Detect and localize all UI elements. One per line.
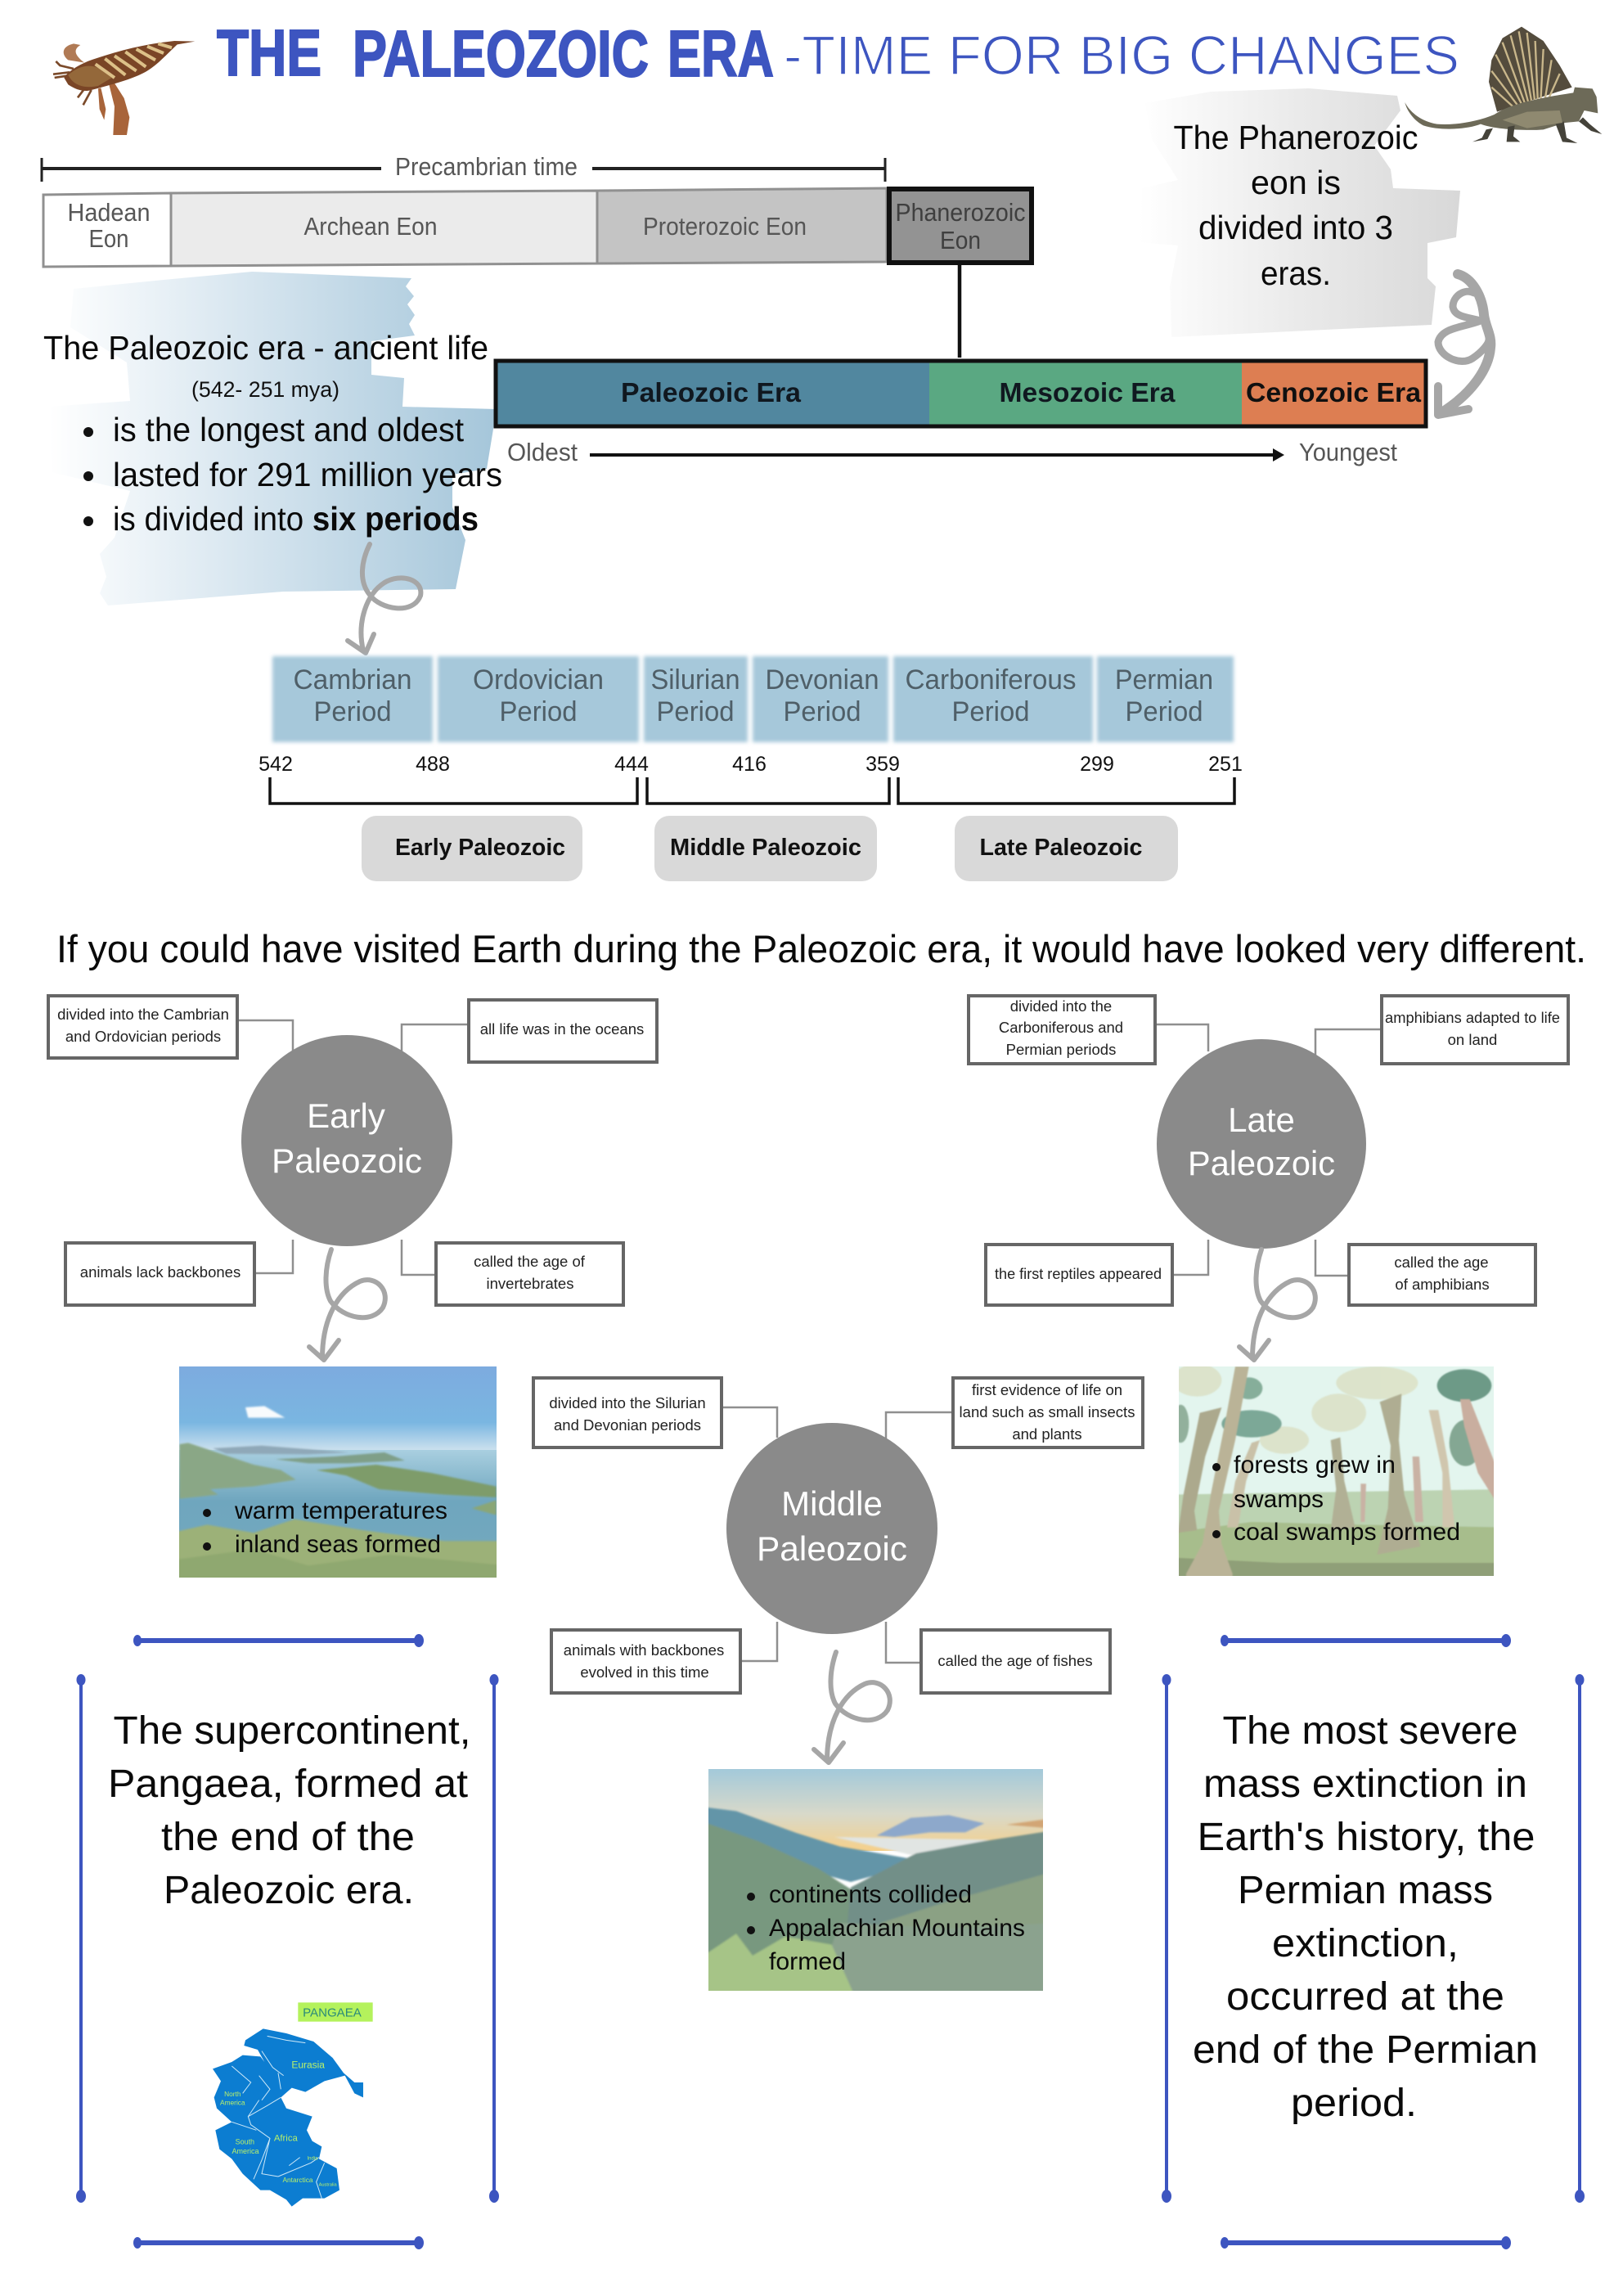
extinction text: Earth's history, the	[1198, 1816, 1535, 1859]
map: Pangaea: Antarctica	[282, 2176, 313, 2184]
pill: Late Paleozoic	[955, 816, 1178, 881]
Pangaea text: The supercontinent,	[113, 1709, 471, 1753]
title: -TIME FOR BIG CHANGES	[784, 25, 1459, 87]
fact: amphibians: amphibians adapted to life	[1385, 1009, 1560, 1026]
fact: periods: Permian periods	[1006, 1041, 1116, 1058]
period labels: Devonian	[766, 664, 879, 696]
fact: invertebrates: invertebrates	[487, 1275, 573, 1292]
map: Pangaea: South	[236, 2138, 254, 2146]
arrow: oldest to youngest	[507, 438, 1397, 466]
fact: amphibians	[1382, 996, 1568, 1064]
period labels: Period	[1126, 696, 1203, 727]
fact: oceans: all life was in the oceans	[480, 1020, 644, 1038]
period dates: 359	[865, 753, 900, 776]
image: inland sea photo: inland seas formed	[235, 1531, 441, 1558]
map: Pangaea: Australia	[319, 2182, 338, 2187]
fact: life on land: land such as small insects	[960, 1403, 1135, 1420]
map: Pangaea: PANGAEA	[303, 2006, 362, 2019]
arrow: oldest to youngest: Oldest	[507, 438, 578, 466]
text: Paleozoic era summary: is the longest and oldest	[113, 411, 465, 448]
arrow: curly to periods	[348, 544, 420, 653]
Middle Paleozoic circle: Middle	[781, 1484, 883, 1523]
pill: Early Paleozoic	[362, 816, 582, 881]
image: swamp forest photo: swamps	[1234, 1486, 1324, 1513]
extinction text: extinction,	[1272, 1922, 1459, 1965]
panel: Middle Paleozoic mind map	[533, 1378, 1143, 1693]
Late Paleozoic circle: Paleozoic	[1188, 1144, 1335, 1182]
arrow: oldest to youngest: Youngest	[1299, 438, 1397, 466]
text: Paleozoic era summary	[43, 329, 502, 538]
text: Paleozoic era summary: lasted for 291 million years	[113, 456, 502, 493]
Late Paleozoic circle: Late	[1228, 1101, 1295, 1139]
extinction text: end of the Permian	[1193, 2028, 1538, 2072]
icon: dimetrodon	[1405, 27, 1602, 143]
extinction text: The most severe	[1222, 1709, 1518, 1753]
panel: mass extinction frame	[1162, 1634, 1585, 2249]
fact: periods	[533, 1378, 722, 1447]
image: swamp forest photo	[1179, 1366, 1494, 1576]
period dates	[259, 753, 1243, 776]
fact: age of fishes: called the age of fishes	[937, 1652, 1093, 1669]
fact: invertebrates	[436, 1243, 623, 1305]
fact: life on land: and plants	[1012, 1425, 1082, 1443]
text: Phanerozoic note: eon is	[1251, 164, 1341, 201]
heading: visited Earth sentence: If you could have visited Earth during the Paleozoic era, it would have looked very different.	[56, 927, 1586, 970]
diagram: era bar: Mesozoic Era	[1000, 377, 1176, 407]
fact: periods	[48, 996, 237, 1058]
period labels: Period	[656, 696, 735, 727]
period labels: Carboniferous	[905, 664, 1077, 696]
arrow: curly from Late Paleozoic	[1239, 1249, 1315, 1360]
fact: oceans	[469, 1000, 657, 1062]
Middle Paleozoic circle: Paleozoic	[757, 1529, 907, 1568]
fact: periods: and Ordovician periods	[65, 1028, 221, 1045]
period labels: Silurian	[651, 664, 740, 696]
map: Pangaea: Eurasia	[291, 2059, 325, 2070]
image: Appalachian mountains photo	[704, 1769, 1055, 1999]
period labels: Permian	[1115, 664, 1213, 696]
Proterozoic Eon: Proterozoic Eon	[643, 212, 807, 241]
panel: Late Paleozoic mind map	[969, 996, 1568, 1305]
Precambrian time bracket: Precambrian time	[395, 152, 578, 181]
Middle Paleozoic circle	[726, 1423, 937, 1634]
period labels: Period	[952, 696, 1029, 727]
period labels: Ordovician	[473, 664, 604, 696]
fact: backbones evolved: animals with backbones	[564, 1641, 724, 1659]
Pangaea text: the end of the	[161, 1816, 415, 1859]
fact: invertebrates: called the age of	[474, 1253, 586, 1270]
Pangaea text: Paleozoic era.	[164, 1869, 414, 1912]
fact: reptiles	[986, 1245, 1172, 1305]
fact: reptiles: the first reptiles appeared	[995, 1265, 1162, 1282]
image: swamp forest photo: forests grew in	[1234, 1452, 1396, 1479]
arrow: curly from Early Paleozoic	[309, 1249, 385, 1360]
pill: Middle Paleozoic: Middle Paleozoic	[670, 835, 861, 861]
period dates: 299	[1080, 753, 1114, 776]
Phanerozoic Eon: Phanerozoic	[895, 198, 1026, 227]
Early Paleozoic circle: Paleozoic	[272, 1141, 422, 1180]
fact: periods: divided into the Cambrian	[57, 1006, 229, 1023]
title: THE	[217, 16, 321, 89]
Late Paleozoic circle	[1157, 1039, 1366, 1249]
fact: periods	[969, 996, 1155, 1064]
fact: age of amphibians: of amphibians	[1395, 1276, 1490, 1293]
text: Paleozoic era summary: The Paleozoic era - ancient life	[43, 329, 488, 367]
image: inland sea photo	[179, 1366, 497, 1578]
extinction text: occurred at the	[1226, 1975, 1504, 2019]
period labels: Period	[784, 696, 861, 727]
Hadean Eon	[43, 193, 171, 267]
image: Appalachian mountains photo: formed	[769, 1948, 846, 1975]
text: Phanerozoic note: divided into 3	[1198, 209, 1393, 246]
Proterozoic Eon	[597, 188, 887, 263]
fact: backbones evolved: evolved in this time	[580, 1663, 709, 1681]
fact: periods: divided into the Silurian	[549, 1394, 706, 1411]
fact: life on land: first evidence of life on	[972, 1381, 1122, 1398]
extinction text: mass extinction in	[1203, 1763, 1527, 1806]
map: Pangaea	[213, 2002, 373, 2207]
diagram: eon timeline	[42, 152, 1032, 358]
fact: amphibians: on land	[1448, 1031, 1497, 1048]
Hadean Eon: Eon	[88, 224, 129, 253]
period labels: Cambrian	[293, 664, 412, 696]
fact: periods: divided into the	[1010, 997, 1112, 1015]
image: Appalachian mountains photo: Appalachian Mountains	[769, 1915, 1025, 1942]
map: Pangaea: India	[307, 2156, 318, 2161]
image: swamp forest photo: coal swamps formed	[1234, 1519, 1460, 1546]
fact: age of amphibians	[1349, 1245, 1535, 1305]
diagram: era bar: Paleozoic Era	[621, 377, 802, 407]
Pangaea text: Pangaea, formed at	[108, 1763, 468, 1806]
image: Appalachian mountains photo: continents collided	[769, 1881, 972, 1908]
period dates: 251	[1208, 753, 1243, 776]
arrow: curly from Middle Paleozoic	[814, 1652, 890, 1763]
period labels: Period	[499, 696, 578, 727]
panel: Pangaea frame	[76, 1634, 499, 2249]
text: Phanerozoic note: eras.	[1261, 254, 1331, 292]
extinction text	[1193, 1709, 1538, 2125]
title	[217, 16, 1459, 90]
period dates: 542	[259, 753, 293, 776]
pill: Early Paleozoic: Early Paleozoic	[395, 835, 565, 861]
icon: sea scorpion	[53, 41, 195, 135]
fact: periods: and Devonian periods	[554, 1416, 701, 1434]
text: Phanerozoic note: The Phanerozoic	[1173, 119, 1418, 156]
extinction text: Permian mass	[1238, 1869, 1493, 1912]
diagram: era bar: Cenozoic Era	[1246, 377, 1422, 407]
period labels: Period	[314, 696, 391, 727]
Early Paleozoic circle: Early	[307, 1096, 385, 1135]
Early Paleozoic circle	[241, 1035, 452, 1246]
panel: blue brush background	[48, 272, 497, 606]
fact: age of fishes	[921, 1630, 1110, 1693]
period dates: 444	[614, 753, 649, 776]
text: Paleozoic era summary: is divided into six periods	[113, 500, 479, 538]
panel: Early Paleozoic mind map	[48, 996, 657, 1305]
fact: periods: Carboniferous and	[999, 1019, 1123, 1036]
title: PALEOZOIC	[353, 17, 649, 90]
period boxes	[272, 656, 1234, 742]
Phanerozoic Eon	[889, 189, 1032, 263]
diagram: era bar	[496, 361, 1426, 426]
fact: age of amphibians: called the age	[1394, 1254, 1489, 1271]
map: Pangaea: America	[220, 2099, 245, 2107]
Phanerozoic Eon: Eon	[940, 226, 981, 254]
pill: Middle Paleozoic	[654, 816, 877, 881]
period dates: 416	[732, 753, 767, 776]
Archean Eon	[171, 191, 597, 266]
pill: Late Paleozoic: Late Paleozoic	[980, 835, 1142, 861]
period labels	[293, 664, 1213, 727]
fact: life on land	[953, 1378, 1143, 1447]
extinction text: period.	[1291, 2082, 1417, 2125]
image: inland sea photo: warm temperatures	[234, 1497, 447, 1524]
fact: backbones: animals lack backbones	[80, 1263, 241, 1281]
map: Pangaea: North	[224, 2090, 241, 2098]
map: Pangaea: Africa	[274, 2134, 298, 2144]
fact: backbones	[65, 1243, 254, 1305]
Pangaea text	[108, 1709, 471, 1912]
text: Paleozoic era summary: (542- 251 mya)	[191, 377, 339, 402]
map: Pangaea: America	[232, 2147, 259, 2155]
period dates: 488	[416, 753, 450, 776]
arrow: curly to era bar	[1438, 274, 1490, 415]
fact: backbones evolved	[551, 1630, 740, 1693]
Precambrian time bracket	[42, 152, 885, 182]
text: Phanerozoic note	[1173, 119, 1418, 292]
chart: geologic periods	[259, 656, 1243, 804]
title: ERA	[668, 17, 774, 90]
panel: grey brush background	[1139, 88, 1460, 337]
Archean Eon: Archean Eon	[304, 212, 437, 241]
Hadean Eon: Hadean	[67, 198, 151, 227]
